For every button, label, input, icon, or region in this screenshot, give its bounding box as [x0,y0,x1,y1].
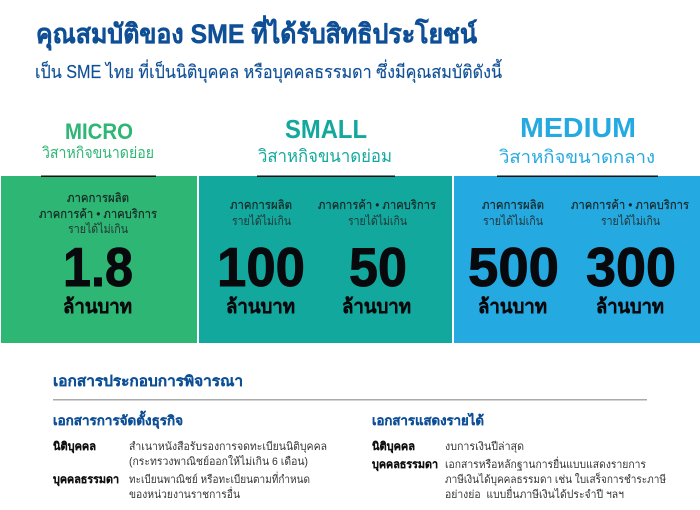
registration individual: บุคคลธรรมดา [53,474,119,487]
income individual: เอกสารหรือหลักฐานการยื่นแบบแสดงรายการ [445,456,646,471]
micro sector labels: รายได้ไม่เกิน [68,222,128,236]
registration individual: ทะเบียนพาณิชย์ หรือทะเบียนตามที่กำหนด [129,471,310,486]
income juristic person: งบการเงินปีล่าสุด [445,440,524,453]
micro unit: ล้านบาท [63,296,132,318]
registration individual [53,471,310,501]
income juristic person [372,440,524,454]
medium heading: MEDIUM [520,112,636,143]
registration juristic person: (กระทรวงพาณิชย์ออกให้ไม่เกิน 6 เดือน) [129,455,308,468]
small trade and service column: 50 [349,236,407,298]
panel: small [199,114,452,343]
micro value: 1.8 [63,236,133,298]
small heading: SMALL [285,114,367,144]
micro sector labels: ภาคการผลิต [67,191,129,205]
small trade and service column [318,198,437,318]
small manufacturing column: ล้านบาท [226,296,295,318]
medium trade and service column: ภาคการค้า • ภาคบริการ [571,198,690,212]
income heading: เอกสารแสดงรายได้ [372,412,484,428]
income individual: อย่างย่อ แบบยื่นภาษีเงินได้ประจำปี ฯลฯ [445,486,624,501]
registration juristic person: สำเนาหนังสือรับรองการจดทะเบียนนิติบุคคล [129,440,327,453]
registration juristic person: นิติบุคคล [53,440,96,454]
panel: medium [454,112,700,343]
medium manufacturing column [468,198,559,318]
subtitle: เป็น SME ไทย ที่เป็นนิติบุคคล หรือบุคคลธรรมดา ซึ่งมีคุณสมบัติดังนี้ [35,59,502,83]
medium trade and service column: 300 [586,236,676,298]
medium manufacturing column: ล้านบาท [478,296,547,318]
medium subtitle: วิสาหกิจขนาดกลาง [499,147,655,167]
small subtitle: วิสาหกิจขนาดย่อม [258,146,392,166]
small trade and service column: ภาคการค้า • ภาคบริการ [318,198,437,212]
medium trade and service column [571,198,690,318]
registration individual: ของหน่วยงานราชการอื่น [129,486,240,501]
title: คุณสมบัติของ SME ที่ได้รับสิทธิประโยชน์ [36,15,477,51]
income individual: บุคคลธรรมดา [372,459,438,472]
medium trade and service column: ล้านบาท [596,296,664,318]
medium trade and service column: รายได้ไม่เกิน [601,214,660,228]
panel: business registration documents [53,410,327,501]
small manufacturing column: 100 [217,236,305,298]
medium manufacturing column: 500 [468,236,559,298]
medium manufacturing column: รายได้ไม่เกิน [483,214,543,228]
micro sector labels [39,191,158,236]
small manufacturing column: ภาคการผลิต [230,198,292,212]
small trade and service column: ล้านบาท [342,296,411,318]
panel: income documents [372,412,666,501]
panel: micro [1,119,197,343]
income individual: ภาษีเงินได้บุคคลธรรมดา เช่น ใบเสร็จการชำระภาษี [445,472,666,486]
micro heading: MICRO [65,119,133,144]
medium manufacturing column: ภาคการผลิต [482,198,544,212]
micro subtitle: วิสาหกิจขนาดย่อย [42,145,154,162]
registration heading: เอกสารการจัดตั้งธุรกิจ [53,410,183,429]
documents heading: เอกสารประกอบการพิจารณา [53,373,243,390]
small manufacturing column: รายได้ไม่เกิน [232,214,291,228]
income juristic person: นิติบุคคล [372,440,415,454]
micro sector labels: ภาคการค้า • ภาคบริการ [39,207,158,221]
small trade and service column: รายได้ไม่เกิน [348,214,407,228]
income individual [372,456,666,501]
small manufacturing column [217,198,305,318]
registration juristic person [53,440,327,468]
